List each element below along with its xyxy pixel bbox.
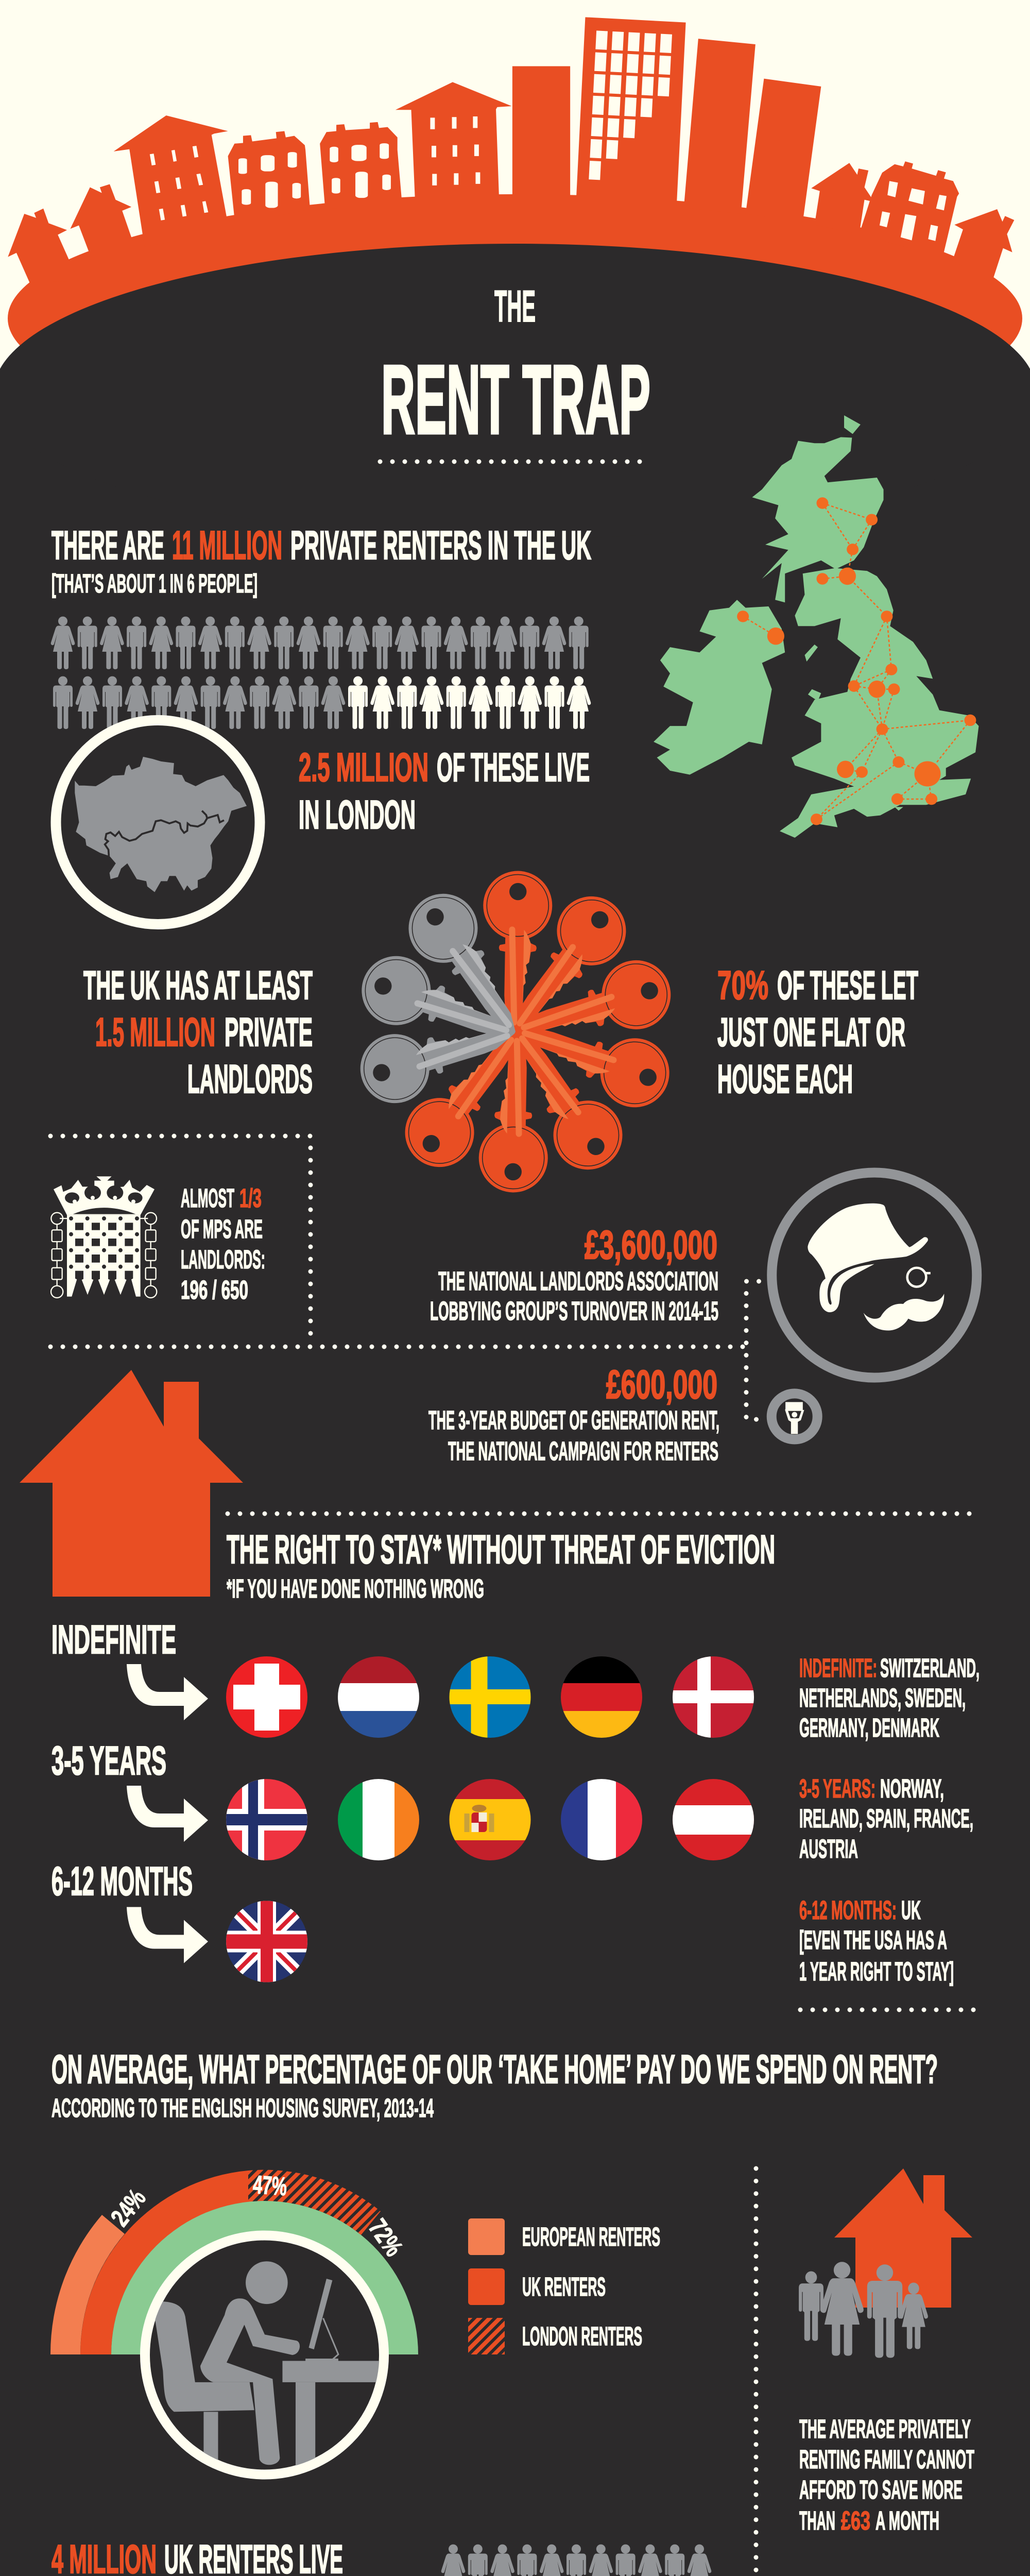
text: 3-5 years countries: 3-5 YEARS: xyxy=(799,1774,876,1803)
text: 1.5 million landlords: PRIVATE xyxy=(225,1009,313,1055)
arc: inner green xyxy=(111,2201,418,2354)
heading: 11 million private renters xyxy=(52,522,591,568)
text: 70 percent let one home: HOUSE EACH xyxy=(717,1056,853,1101)
legend swatch: London xyxy=(468,2318,505,2354)
city connection lines xyxy=(743,503,970,819)
building windows xyxy=(150,30,947,241)
flag: France xyxy=(560,1778,643,1861)
flag: Denmark xyxy=(672,1656,754,1738)
text: 1.5 million landlords xyxy=(83,962,313,1101)
row labels: 6-12 MONTHS xyxy=(52,1858,193,1904)
text: 1.5 million landlords: 1.5 MILLION xyxy=(95,1009,215,1055)
title: THE xyxy=(494,282,536,331)
skyline header illustration xyxy=(8,17,1022,443)
text: Generation Rent budget: THE NATIONAL CAMPAIGN FOR RENTERS xyxy=(448,1436,718,1466)
flag: Netherlands xyxy=(337,1656,420,1738)
landmass xyxy=(654,415,978,838)
row labels xyxy=(52,1617,193,1904)
heading: 11 million private renters: 11 MILLION xyxy=(172,522,282,568)
text: landlords association turnover: £3,600,000 xyxy=(585,1222,717,1267)
heading: right to stay: *IF YOU HAVE DONE NOTHING WRONG xyxy=(227,1574,484,1603)
legend xyxy=(468,2218,660,2354)
subheading: 1 in 6: [THAT’S ABOUT 1 IN 6 PEOPLE] xyxy=(52,569,258,598)
text: landlords association turnover: LOBBYING GROUP’S TURNOVER IN 2014-15 xyxy=(430,1296,718,1326)
text: 3-5 years countries: AUSTRIA xyxy=(799,1834,858,1863)
row labels: 3-5 YEARS xyxy=(52,1738,166,1783)
label: 24%: 24% xyxy=(105,2184,151,2231)
text: 6-12 months countries: 6-12 MONTHS: xyxy=(799,1895,897,1925)
text: MPs are landlords xyxy=(181,1183,265,1304)
text: 4 million in poverty xyxy=(52,2536,367,2576)
arc: European renters 24% xyxy=(50,2215,125,2354)
flag: Switzerland xyxy=(226,1656,308,1738)
text: 3-5 years countries xyxy=(799,1774,973,1863)
flag: Sweden xyxy=(449,1656,531,1738)
text: MPs are landlords: 1/3 xyxy=(239,1183,262,1213)
text: Generation Rent budget: £600,000 xyxy=(606,1362,717,1407)
heading: percentage of pay: ACCORDING TO THE ENGLISH HOUSING SURVEY, 2013-14 xyxy=(52,2093,434,2123)
text: MPs are landlords: ALMOST xyxy=(181,1183,234,1213)
arc: London renters 72% xyxy=(248,2170,381,2235)
text: landlords association turnover: THE NATIONAL LANDLORDS ASSOCIATION xyxy=(438,1266,718,1296)
text: 6-12 months countries xyxy=(799,1895,954,1986)
legend: UK RENTERS xyxy=(522,2272,606,2301)
icon: family and house xyxy=(799,2168,972,2358)
buildings xyxy=(8,17,1014,282)
city dots xyxy=(737,497,976,825)
icon: portcullis xyxy=(51,1176,157,1298)
label: 47%: 47% xyxy=(252,2170,288,2201)
dark dome body xyxy=(0,244,1030,539)
flag: UK xyxy=(226,1900,308,1982)
chart: rent share arcs xyxy=(50,2170,418,2354)
title xyxy=(381,282,650,454)
map: UK and Ireland xyxy=(654,415,978,838)
legend swatch: UK xyxy=(468,2268,505,2305)
text: Generation Rent budget xyxy=(428,1362,719,1466)
text: indefinite countries xyxy=(799,1653,980,1742)
text: 2.5 million in London: OF THESE LIVE xyxy=(437,744,590,790)
heading: right to stay xyxy=(227,1527,775,1603)
keys wheel: 7 orange, 3 grey xyxy=(352,870,679,1193)
pictogram: 44 renters, 10 in London xyxy=(51,617,591,729)
text: 70 percent let one home xyxy=(717,962,918,1101)
orange ground arc xyxy=(8,194,1022,443)
text: RENT TRAP xyxy=(381,345,650,454)
flag: Ireland xyxy=(337,1778,420,1861)
text: 6-12 months countries: UK xyxy=(901,1895,921,1925)
arc: UK renters 47% xyxy=(80,2171,248,2354)
heading: percentage of pay xyxy=(52,2046,938,2123)
text: 2.5 million in London xyxy=(299,744,590,837)
heading: 11 million private renters: PRIVATE RENTERS IN THE UK xyxy=(290,522,591,568)
text: 2.5 million in London: 2.5 MILLION xyxy=(299,744,428,790)
text: LANDLORDS: xyxy=(181,1245,265,1274)
sky background xyxy=(0,0,1030,371)
icon: campaigner in small circle xyxy=(771,1394,817,1439)
pictogram: renters in poverty xyxy=(441,2545,711,2576)
flag: Spain xyxy=(449,1778,531,1861)
text: family cannot save: THAN xyxy=(799,2506,835,2535)
icon: London map in circle xyxy=(56,720,260,924)
text: family cannot save: £63 xyxy=(841,2506,870,2535)
text: MPs are landlords: 196 / 650 xyxy=(181,1275,248,1304)
text: landlords association turnover xyxy=(430,1222,718,1326)
text: 3-5 years countries: NORWAY, xyxy=(880,1774,944,1803)
legend swatch: European xyxy=(468,2218,505,2255)
row labels: INDEFINITE xyxy=(52,1617,176,1662)
text: 70 percent let one home: 70% xyxy=(717,962,768,1008)
icon: person at desk in circle xyxy=(145,2235,388,2475)
text: EUROPEAN RENTERS xyxy=(522,2222,660,2251)
text: family cannot save xyxy=(799,2414,974,2535)
text: LANDLORDS xyxy=(187,1056,313,1101)
text: family cannot save: A MONTH xyxy=(876,2506,939,2535)
arrows xyxy=(127,1664,208,1963)
text: Generation Rent budget: THE 3-YEAR BUDGET OF GENERATION RENT, xyxy=(428,1405,719,1435)
text: indefinite countries: INDEFINITE: xyxy=(799,1653,877,1683)
flag: Norway xyxy=(226,1778,308,1861)
text: 1.5 million landlords: THE UK HAS AT LEAST xyxy=(83,962,313,1008)
legend: LONDON RENTERS xyxy=(522,2321,642,2351)
icon: landlord with top hat and moustache xyxy=(772,1173,977,1378)
text: 2.5 million in London: IN LONDON xyxy=(299,792,416,837)
flags: indefinite xyxy=(226,1656,754,1738)
flags: 3-5 years xyxy=(226,1778,754,1861)
icon: large house xyxy=(20,1370,243,1597)
flag: Austria xyxy=(672,1778,754,1861)
text: MPs are landlords: OF MPS ARE xyxy=(181,1214,263,1244)
heading: 11 million private renters: THERE ARE xyxy=(52,522,164,568)
flag: Germany xyxy=(560,1656,643,1738)
label: 72%: 72% xyxy=(363,2214,408,2261)
